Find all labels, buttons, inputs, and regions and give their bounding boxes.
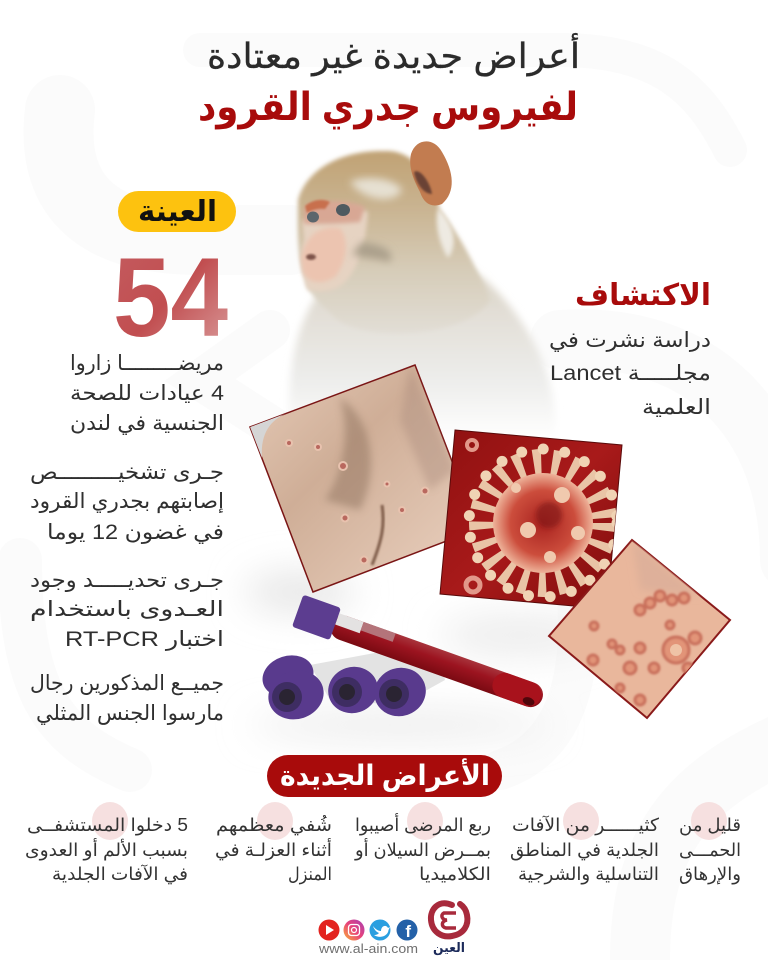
photo: virus micrograph bbox=[440, 430, 622, 609]
symptom: mild fever bbox=[679, 802, 741, 885]
symptom: skin lesions: كثيــــــر من الآفات bbox=[512, 814, 659, 836]
image: test tube caps bbox=[257, 649, 445, 726]
text block: detection bbox=[30, 569, 224, 651]
heading pill: new symptoms bbox=[267, 755, 502, 797]
logo: Al-Ain bbox=[431, 903, 467, 955]
symptom: mild fever: الحمـــى bbox=[679, 840, 741, 860]
symptom: recovery at home: المنزل bbox=[288, 864, 332, 885]
title: لفيروس جدري القرود bbox=[198, 86, 578, 130]
text block: all men: مارسوا الجنس المثلي bbox=[36, 702, 224, 725]
symptom: gonorrhea or chlamydia bbox=[354, 802, 491, 884]
text block: patients: مريضـــــــــا زاروا bbox=[70, 352, 224, 375]
image shadows bbox=[245, 572, 600, 737]
symptom: recovery at home: شُفي معظمهم bbox=[216, 815, 332, 836]
logo: Al-Ain: العين bbox=[433, 940, 465, 955]
symptom: recovery at home bbox=[215, 802, 332, 885]
text block: detection: اختبار RT-PCR bbox=[65, 628, 224, 651]
photo: skin lesions on shoulder bbox=[249, 364, 452, 593]
text block: diagnosis: إصابتهم بجدري القرود bbox=[30, 490, 224, 514]
discovery block: العلمية bbox=[642, 396, 711, 419]
text block: all men bbox=[30, 672, 224, 725]
discovery block bbox=[549, 279, 711, 419]
text block: diagnosis bbox=[30, 461, 224, 544]
label pill: sample: العينة bbox=[138, 196, 217, 228]
symptom: gonorrhea or chlamydia: الكلاميديا bbox=[419, 864, 491, 884]
photo: pox rash close-up bbox=[549, 540, 730, 718]
text block: detection: جـرى تحديـــــد وجود bbox=[30, 569, 224, 592]
symptom: skin lesions: التناسلية والشرجية bbox=[518, 864, 659, 885]
symptom: gonorrhea or chlamydia: بمــرض السيلان أو bbox=[354, 838, 491, 861]
symptom: hospital admissions: 5 دخلوا المستشفــى bbox=[27, 815, 188, 836]
social media icons bbox=[318, 920, 418, 941]
discovery block: دراسة نشرت في bbox=[549, 329, 711, 352]
discovery block: مجلـــــة Lancet bbox=[550, 362, 711, 385]
label pill: sample bbox=[118, 191, 236, 232]
text block: all men: جميــع المذكورين رجال bbox=[30, 672, 224, 695]
title bbox=[198, 33, 580, 130]
symptom: mild fever: والإرهاق bbox=[679, 864, 741, 885]
symptom: hospital admissions: في الآفات الجلدية bbox=[52, 863, 188, 885]
text block: diagnosis: في غضون 12 يوما bbox=[47, 521, 224, 544]
symptom: recovery at home: أثناء العزلـة في bbox=[215, 838, 332, 861]
symptom: mild fever: قليل من bbox=[679, 815, 741, 836]
text block: patients bbox=[70, 352, 224, 435]
symptom: hospital admissions bbox=[25, 802, 188, 885]
symptom: hospital admissions: بسبب الألم أو العدوى bbox=[25, 838, 188, 861]
text block: diagnosis: جـرى تشخيـــــــــص bbox=[30, 461, 224, 484]
discovery block: الاكتشاف bbox=[575, 279, 711, 312]
heading pill: new symptoms: الأعراض الجديدة bbox=[280, 758, 490, 792]
big number 54: 54 bbox=[113, 235, 228, 360]
text block: patients: 4 عيادات للصحة bbox=[70, 382, 224, 405]
social media icons: f bbox=[405, 922, 411, 941]
symptom: skin lesions: الجلدية في المناطق bbox=[510, 840, 659, 861]
title: أعراض جديدة غير معتادة bbox=[207, 33, 580, 77]
image: blood sample tube bbox=[292, 595, 548, 714]
symptom: skin lesions bbox=[510, 802, 659, 885]
symptom: gonorrhea or chlamydia: ربع المرضى أصيبوا bbox=[355, 813, 491, 836]
website url: www.al-ain.com bbox=[318, 941, 418, 956]
text block: detection: العـدوى باستخدام bbox=[30, 598, 224, 621]
image: monkey bbox=[289, 141, 556, 440]
text block: patients: الجنسية في لندن bbox=[70, 412, 224, 435]
